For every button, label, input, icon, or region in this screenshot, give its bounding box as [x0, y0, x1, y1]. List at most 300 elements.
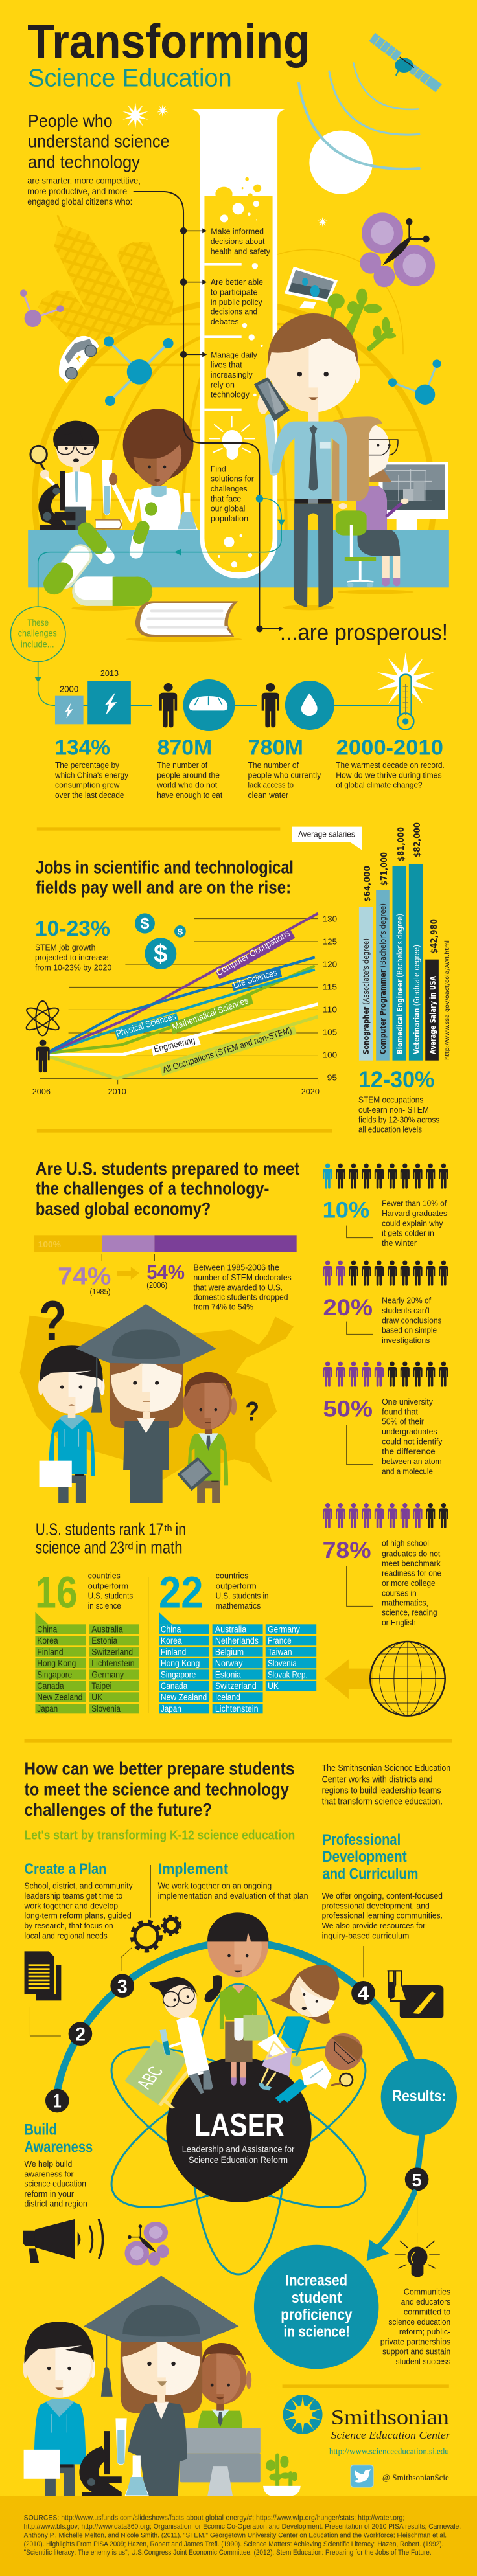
chart label text — [115, 928, 293, 1075]
stat: 10 percent: could explain why — [382, 1219, 443, 1228]
chart lines — [49, 914, 318, 1079]
stat: 20 percent — [323, 1261, 448, 1345]
figure: left scientist with board — [124, 1977, 213, 2109]
text: benefits list — [211, 227, 270, 523]
heading: how can we better prepare: to meet the science and technology — [25, 1779, 289, 1800]
stat: 74 to 54 percent: (1985) — [89, 1287, 110, 1296]
table: mathematics countries: Slovak Rep. — [268, 1669, 308, 1680]
callout: increased proficiency: Increased — [285, 2272, 347, 2289]
text: benefits list: to participate — [211, 288, 258, 297]
text: benefits list: Are better able — [211, 278, 263, 287]
stat: 22 mathematics: mathematics — [216, 1601, 261, 1610]
footer: sources: SOURCES: http://www.usfunds.com/slideshows/facts-about-global-energy/#; https://www.wfp.org/hunger/stats; http://water.org; — [24, 2514, 404, 2522]
text: benefits list: population — [211, 514, 248, 523]
text: benefits list: that face — [211, 494, 241, 504]
stat: 50 percent: 50% of their — [382, 1417, 424, 1427]
text: communities: committed to — [404, 2307, 450, 2317]
callout: these challenges include — [10, 607, 65, 705]
icon: blue molecule left — [104, 336, 174, 406]
table: science countries: Korea — [37, 1636, 58, 1645]
stat: 870M: The number of — [157, 761, 207, 770]
table: science countries: China — [37, 1624, 58, 1634]
heading: U.S. rank: U.S. students rank 17 — [36, 1520, 163, 1539]
text: communities: science education — [388, 2318, 450, 2327]
callout: average salaries: Average salaries — [298, 830, 355, 839]
table: mathematics countries: Estonia — [215, 1669, 241, 1680]
icon: person and water drop — [262, 681, 334, 730]
text: doctorates: that were awarded to U.S. — [194, 1283, 283, 1293]
connector line — [84, 705, 399, 706]
stat: 22 mathematics: U.S. students in — [216, 1591, 268, 1601]
icon: step 5: 5 — [412, 2171, 422, 2190]
table: mathematics countries: Switzerland — [215, 1681, 257, 1691]
logo: Smithsonian — [283, 2395, 451, 2456]
stat: 10-23%: STEM job growth — [35, 943, 95, 953]
line chart gridlines and axis: 125 — [323, 937, 337, 947]
stat: 78 percent: science, reading — [382, 1608, 437, 1618]
stat: 134%: over the last decade — [55, 791, 124, 800]
stat: 50 percent: and a molecule — [382, 1467, 433, 1476]
icon: atom — [27, 1001, 59, 1035]
badge: LASER: Leadership and Assistance for — [182, 2144, 295, 2154]
text: benefits list: challenges — [211, 484, 248, 493]
table: science countries: Singapore — [37, 1669, 72, 1680]
stat: 12-30%: 12-30% — [358, 1067, 434, 1092]
step text: build awareness: Awareness — [25, 2138, 93, 2156]
heading: U.S. rank — [36, 1520, 186, 1557]
table: mathematics countries: France — [268, 1636, 292, 1645]
step text: build awareness — [25, 2121, 93, 2179]
table: science countries: Australia — [91, 1624, 123, 1634]
panel: LASER model — [24, 1831, 457, 2274]
step text: create a plan: local and regional needs — [25, 1931, 108, 1941]
process numbers: 1 — [53, 2090, 62, 2112]
icon: dollar coins — [135, 913, 186, 969]
process numbers: 3 — [117, 1976, 128, 1997]
panel: results and Smithsonian footer — [0, 2167, 477, 2576]
table: science countries: Germany — [91, 1669, 124, 1680]
line chart gridlines and axis: 105 — [323, 1028, 337, 1037]
table: science countries: Taipei — [91, 1681, 111, 1691]
figure: right scientist — [275, 2033, 363, 2103]
icon: satellite — [369, 33, 442, 92]
table: mathematics countries — [159, 1612, 316, 1713]
icon: butterfly — [124, 2222, 169, 2266]
stat: 50 percent: between an atom — [382, 1457, 442, 1466]
intro text: are smarter, more competitive, — [27, 175, 141, 186]
panel: hero title and illustration — [20, 15, 449, 642]
figure: boy in hoodie bottom — [23, 2322, 95, 2496]
text: build awareness continued — [25, 2180, 87, 2209]
figure: woman at computer — [332, 416, 448, 587]
heading: how can we better prepare: How can we better prepare students — [25, 1759, 294, 1779]
stat: 870M: 870M — [157, 735, 212, 760]
icon: capsules — [54, 527, 152, 611]
step text: implement — [158, 1860, 308, 1901]
stat: 12-30% — [358, 1067, 439, 1135]
stat: 20 percent: based on simple — [382, 1326, 437, 1335]
stat: 10-23%: from 10-23% by 2020 — [35, 963, 111, 973]
icon: twitter: @ SmithsonianScie — [382, 2473, 449, 2481]
salary labels: $64,000 — [363, 866, 373, 902]
text: benefits list: technology — [211, 390, 250, 400]
process numbers — [45, 1974, 375, 2112]
table: science countries: Japan — [37, 1704, 58, 1713]
figure: man on phone — [254, 313, 360, 610]
footer: sources — [0, 2496, 477, 2576]
stat: 74 to 54 percent — [58, 1261, 185, 1296]
icon: energy bars — [55, 669, 131, 724]
stat: 134%: which China's energy — [54, 771, 129, 780]
stat: 74 to 54 percent: (2006) — [146, 1281, 167, 1290]
text: Smithsonian intro — [322, 1763, 450, 1807]
icon: energy bars: 2013 — [100, 669, 119, 678]
text: benefits list: our global — [211, 504, 245, 514]
bar chart: salaries — [359, 864, 439, 1061]
chart label text: Mathematical Sciences — [170, 995, 250, 1032]
stat: 10 percent: 10% — [323, 1198, 369, 1223]
panel: person rows and percentages — [323, 1164, 448, 1248]
stat: 2000-2010 — [336, 735, 445, 790]
text: doctorates: number of STEM doctorates — [194, 1273, 292, 1282]
table: science countries: Canada — [37, 1681, 64, 1691]
icon: small monitor and plants — [285, 267, 382, 337]
text: benefits list: lives that — [211, 360, 242, 370]
text: benefits list: solutions for — [211, 474, 254, 484]
table: mathematics countries: Taiwan — [268, 1647, 292, 1657]
icon: green plant right — [347, 298, 396, 348]
text: doctorates — [194, 1263, 292, 1312]
table: mathematics countries: Slovenia — [268, 1658, 297, 1668]
callout: increased proficiency: in science! — [283, 2322, 350, 2340]
heading: jobs: Jobs in scientific and technological — [36, 857, 294, 877]
table: science countries: Hong Kong — [37, 1658, 76, 1668]
line chart gridlines and axis: 130 — [323, 914, 337, 924]
figure: graduate — [76, 1304, 216, 1503]
figure: scientist with test tube — [96, 409, 198, 530]
line chart gridlines and axis: 115 — [323, 982, 337, 992]
stat: 50 percent: 50% — [323, 1396, 373, 1422]
panel: doctorates and students — [20, 1235, 297, 1503]
stat: 10-23%: projected to increase — [35, 953, 109, 962]
intro text: understand science — [28, 132, 169, 152]
icon: wire globe — [370, 1642, 445, 1716]
text: communities: reform; public- — [399, 2327, 450, 2337]
heading: are students prepared: based global economy? — [36, 1199, 211, 1219]
stat: 134%: consumption grew — [55, 780, 120, 790]
table: mathematics countries: Australia — [215, 1624, 247, 1634]
figure: black boy behind monitor — [180, 2343, 261, 2496]
title: Transforming — [27, 15, 310, 69]
stat: 780M: The number of — [248, 761, 299, 770]
panel: global challenges — [10, 607, 448, 800]
stat: 74 to 54 percent: 74% — [58, 1262, 111, 1290]
heading: U.S. rank: science and 23 — [36, 1538, 124, 1557]
stat: 12-30%: STEM occupations — [358, 1095, 423, 1105]
icon: energy bars: 2000 — [60, 685, 78, 694]
stat: 12-30%: out-earn non- STEM — [358, 1105, 429, 1114]
badge: LASER: LASER — [194, 2107, 285, 2143]
table: mathematics countries: China — [161, 1624, 181, 1634]
icon: microscope bottom — [79, 2418, 127, 2496]
salary labels: $42,980 — [430, 919, 439, 954]
stat: 78 percent: graduates do not — [382, 1549, 441, 1559]
title: Science Education — [28, 64, 232, 92]
salary labels: Biomedical Engineer (Bachelor's degree) — [395, 914, 404, 1054]
heading: how can we better prepare — [25, 1759, 295, 1843]
icon: person at axis — [36, 1040, 50, 1072]
chart label text: Computer Occupations — [215, 928, 292, 978]
icon: documents — [25, 1951, 61, 2000]
stat: 870M — [156, 735, 222, 800]
step text: professional development — [322, 1831, 443, 1941]
stat: 16 science: outperform — [88, 1581, 128, 1591]
line chart gridlines and axis: 120 — [323, 960, 337, 969]
stat: 16 science: countries — [88, 1571, 121, 1581]
text: benefits list: in public policy — [211, 298, 262, 307]
step text: implement: implementation and evaluation of that plan — [158, 1892, 308, 1901]
logo: Smithsonian: Smithsonian — [331, 2405, 449, 2429]
stat: 50 percent — [323, 1362, 448, 1476]
icon: question marks: ? — [245, 1396, 259, 1426]
stat: 20 percent: Nearly 20% of — [382, 1296, 431, 1305]
table: science countries: Finland — [37, 1647, 64, 1657]
heading: are students prepared: Are U.S. students prepared to meet — [36, 1158, 299, 1179]
stat: 780M: lack access to — [248, 780, 294, 790]
stat: 16 science: in science — [88, 1601, 121, 1610]
stat: 870M: world who do not — [156, 780, 218, 790]
callout: these challenges include: include... — [21, 639, 54, 650]
line chart gridlines and axis: 100 — [323, 1050, 337, 1060]
table: mathematics countries: UK — [268, 1681, 279, 1691]
figure: scientist with microscope — [30, 421, 99, 530]
icon: light bulb — [210, 416, 254, 460]
heading: U.S. rank: in — [175, 1520, 186, 1539]
text: communities: private partnerships — [380, 2338, 450, 2347]
panel: doctorates and students: 100% — [38, 1240, 61, 1249]
title — [27, 15, 310, 92]
stat: 78 percent: of high school — [382, 1539, 429, 1548]
heading: how can we better prepare: Let's start by transforming K-12 science education — [25, 1828, 295, 1843]
heading: U.S. rank: th — [164, 1523, 172, 1533]
step text: professional development: Professional — [323, 1831, 401, 1849]
icon: flasks and folder — [388, 1970, 443, 2018]
step text: professional development: inquiry-based curriculum — [322, 1931, 409, 1941]
stat: 780M: clean water — [248, 791, 288, 800]
icon: electric car — [59, 336, 99, 383]
stat: 20 percent: students can't — [382, 1306, 430, 1315]
text: benefits list: Manage daily — [211, 350, 257, 360]
text: build awareness continued: science education — [25, 2180, 86, 2189]
table: science countries: UK — [91, 1692, 103, 1702]
stat: 10 percent — [323, 1164, 448, 1248]
stat: 50 percent: found that — [382, 1407, 418, 1417]
step text: create a plan — [24, 1860, 133, 1941]
stat: 780M — [248, 735, 321, 800]
stat: 22 mathematics: 22 — [159, 1567, 204, 1617]
line chart gridlines and axis: 95 — [327, 1073, 337, 1083]
heading: U.S. rank: rd — [124, 1541, 134, 1552]
stat: 78 percent: readiness for one — [382, 1568, 441, 1578]
stat: 10-23% — [35, 916, 111, 973]
stat: 78 percent: or more college — [382, 1579, 436, 1588]
step text: build awareness: Build — [25, 2121, 57, 2138]
figure: boy in hoodie — [38, 1345, 104, 1503]
stat: 2000-2010: of global climate change? — [336, 780, 423, 790]
text: benefits list: health and safety — [211, 247, 270, 256]
badge: LASER: Science Education Reform — [189, 2155, 288, 2165]
icon: flask bottom — [124, 2456, 149, 2496]
process numbers: 4 — [358, 1983, 369, 2004]
icon: butterfly — [360, 212, 435, 287]
icon: plant in pot — [263, 2456, 301, 2496]
stat: 134% — [54, 735, 129, 800]
icon: open book — [126, 601, 242, 642]
icon: megaphone — [23, 2219, 103, 2263]
stat: 78 percent — [323, 1503, 448, 1627]
text: communities: student success — [396, 2357, 450, 2366]
intro text: and technology — [28, 153, 140, 172]
heading: how can we better prepare: challenges of the future? — [25, 1800, 212, 1820]
text: doctorates: from 74% to 54% — [194, 1302, 253, 1312]
step text: implement: Implement — [158, 1860, 228, 1878]
icon: sparkles — [122, 102, 328, 227]
step text: create a plan: work together and develop — [24, 1901, 118, 1911]
stat: 780M: 780M — [248, 735, 303, 760]
figure: right teacher — [257, 1965, 339, 2090]
text: communities — [380, 2288, 450, 2366]
chart line labels — [115, 930, 297, 1076]
table: science countries: Lichtenstein — [91, 1658, 134, 1668]
text: doctorates: Between 1985-2006 the — [194, 1263, 279, 1272]
icon: dollar coins: $ — [140, 915, 149, 932]
stat: 16 science: 16 — [35, 1567, 78, 1617]
badge: LASER — [166, 2057, 312, 2202]
icon: purple molecule — [20, 289, 64, 327]
stat: 20 percent: 20% — [323, 1295, 373, 1320]
salary labels: Veterinarian (Graduate degree) — [412, 945, 421, 1054]
stat: 78 percent: meet benchmark — [382, 1559, 441, 1568]
stat: 50 percent: undergraduates — [382, 1427, 437, 1436]
step text: build awareness: We help build — [25, 2160, 72, 2169]
figure: teacher center — [204, 1912, 269, 2086]
table: science countries: Switzerland — [91, 1647, 133, 1657]
salary labels — [362, 822, 451, 1060]
icon: black light bulb — [395, 2241, 439, 2277]
text: benefits list: decisions about — [211, 237, 265, 246]
icon: dollar coins: $ — [154, 940, 168, 967]
text: benefits list: Find — [211, 464, 226, 474]
table: mathematics countries: Finland — [161, 1647, 186, 1657]
icon: person and bread — [159, 679, 235, 731]
logo: Smithsonian: Science Education Center — [331, 2429, 451, 2441]
table: science countries: Slovenia — [91, 1704, 121, 1713]
table: mathematics countries: Belgium — [215, 1647, 244, 1657]
step text: create a plan: long-term reform plans, guided — [25, 1911, 132, 1921]
stat: 134%: 134% — [54, 735, 110, 760]
intro text: more productive, and more — [27, 186, 127, 196]
heading: jobs: fields pay well and are on the rise: — [36, 877, 291, 898]
stat: 74 to 54 percent: 54% — [146, 1261, 185, 1283]
heading: U.S. rank: in math — [135, 1538, 183, 1557]
arrow: teal connector to challenges — [38, 495, 285, 607]
stat: 78 percent: or English — [382, 1618, 416, 1627]
chart label text: Engineering — [153, 1035, 196, 1054]
panel: rankings tables — [25, 1567, 452, 1843]
text: communities: and educators — [401, 2298, 450, 2307]
stat: 12-30%: all education levels — [358, 1125, 422, 1135]
table: science countries — [35, 1612, 139, 1713]
callout: increased proficiency: student — [292, 2288, 342, 2306]
stat: 20 percent: investigations — [382, 1336, 430, 1345]
stat: 780M: people who currently — [248, 771, 321, 780]
stat: 50 percent: One university — [382, 1397, 434, 1407]
figure: boy with tablet — [177, 1372, 237, 1503]
step text: create a plan: Create a Plan — [25, 1860, 106, 1878]
text: benefits list: Make informed — [211, 227, 264, 236]
table: mathematics countries: Hong Kong — [161, 1658, 200, 1668]
text: benefits list: rely on — [211, 380, 235, 390]
stat: 10-23%: 10-23% — [35, 916, 110, 940]
step text: create a plan: School, district, and community — [25, 1881, 133, 1891]
text: benefits list: debates — [211, 317, 238, 326]
stat: 22 mathematics: countries — [216, 1571, 248, 1581]
intro text — [27, 111, 169, 207]
step text: create a plan: leadership teams get time to — [25, 1892, 122, 1901]
stat: 78 percent: mathematics, — [382, 1598, 428, 1608]
callout: these challenges include: These — [27, 618, 49, 627]
arrow: from globe to tables — [324, 1659, 373, 1699]
stat: 22 mathematics: outperform — [216, 1581, 257, 1591]
heading: are students prepared: the challenges of a technology- — [36, 1179, 269, 1199]
table: mathematics countries: Norway — [215, 1658, 243, 1668]
callout: results — [381, 2059, 457, 2167]
icon: thermometer and sun — [377, 653, 434, 730]
salary labels: $71,000 — [380, 852, 390, 886]
figure: left scientist with board: ABC — [132, 2064, 169, 2092]
arrow: to proficiency — [367, 2193, 414, 2261]
icon: step 5 — [405, 2167, 428, 2191]
salary labels: $81,000 — [397, 827, 406, 861]
salary labels: $82,000 — [413, 822, 423, 857]
salary labels: Average Salary in USA — [428, 975, 437, 1054]
icon: blue molecule right — [388, 359, 441, 405]
icon: twitter — [351, 2465, 449, 2487]
panel: jobs chart and salaries — [27, 827, 439, 1135]
arrow: connector line from intro to prosperous — [134, 192, 283, 632]
line chart gridlines and axis — [32, 914, 337, 1096]
table: mathematics countries: Germany — [268, 1624, 300, 1634]
salary labels: Sonographer (Associate's degree) — [362, 938, 371, 1054]
table: science countries: New Zealand — [37, 1692, 82, 1702]
orbits — [90, 1984, 387, 2274]
text: build awareness continued: reform in your — [25, 2189, 74, 2199]
stat: 22 mathematics — [159, 1567, 268, 1617]
line chart gridlines and axis: 2010 — [108, 1087, 126, 1096]
map: USA — [20, 1316, 294, 1483]
stat: 20 percent: draw conclusions — [382, 1316, 442, 1326]
arc: process path — [57, 1941, 413, 2092]
icon: gears — [132, 1917, 180, 1950]
callout: average salaries — [292, 827, 362, 850]
salary labels: Computer Programmer (Bachelor's degree) — [378, 903, 388, 1054]
chart surface: lab table — [28, 530, 449, 594]
salary labels: http://www.ssa.gov/oact/cola/AWI.html — [444, 940, 451, 1060]
callout: increased proficiency: proficiency — [281, 2306, 353, 2323]
heading: jobs — [36, 857, 294, 898]
text: benefits list: increasingly — [211, 370, 253, 379]
table: mathematics countries: New Zealand — [161, 1692, 207, 1702]
